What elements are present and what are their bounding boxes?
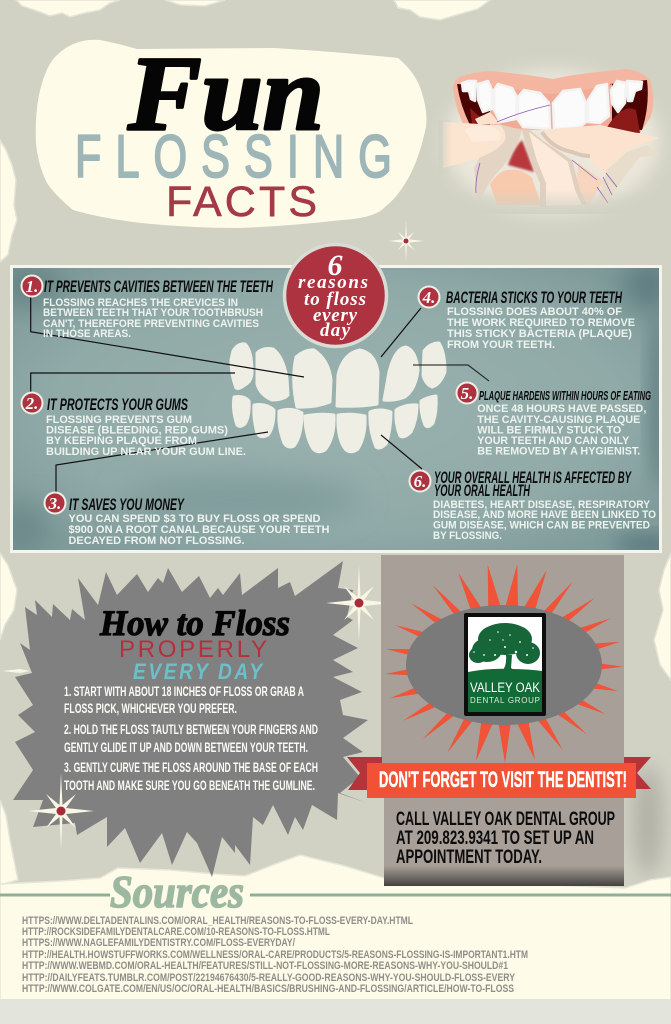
title: Flossing: FLOSSING [75,124,392,191]
leader lines [31,297,489,493]
oval [406,605,602,725]
finger [475,112,500,124]
reason 5: THE CAVITY-CAUSING PLAQUE [477,414,640,426]
source list: HTTP://ROCKSIDEFAMILYDENTALCARE.COM/10-REASONS-TO-FLOSS.HTML [22,926,330,938]
reason 3: $900 ON A ROOT CANAL BECAUSE YOUR TEETH [68,524,330,536]
ribbon banner [347,757,651,798]
reason 6: DIABETES, HEART DISEASE, RESPIRATORY [433,499,651,511]
panel background [381,555,624,765]
reason 1 [22,276,273,340]
flossing steps: 3. GENTLY CURVE THE FLOSS AROUND THE BASE OF EACH [64,760,318,775]
reason 4: FROM YOUR TEETH. [447,339,555,351]
badge: 6 reasons to floss every day: reasons [298,272,368,293]
reason 4: THIS STICKY BACTERIA (PLAQUE) [447,328,632,340]
reason 5: 5. [461,384,473,403]
reason 5: BE REMOVED BY A HYGIENIST. [477,446,640,458]
sunburst [385,564,623,763]
floss [476,105,617,203]
source list: HTTP://WWW.COLGATE.COM/EN/US/OC/ORAL-HEALTH/BASICS/BRUSHING-AND-FLOSSING/ARTICLE/HOW-TO-FLOSS [22,983,514,995]
badge: 6 reasons to floss every day: to floss [304,289,366,310]
mouth below teeth [508,140,534,172]
badge: 6 reasons to floss every day [284,244,386,346]
source list: HTTP://WWW.WEBMD.COM/ORAL-HEALTH/FEATURES/STILL-NOT-FLOSSING-MORE-REASONS-WHY-YOU-SHOULD#1 [22,960,508,972]
reason 1: IN THOSE AREAS. [43,328,131,340]
flossing steps: TOOTH AND MAKE SURE YOU GO BENEATH THE GUMLINE. [64,778,315,793]
reason 6 [410,468,656,542]
reason 2: DISEASE (BLEEDING, RED GUMS) [46,424,228,436]
flossing steps: 2. HOLD THE FLOSS TAUTLY BETWEEN YOUR FINGERS AND [64,722,318,737]
reason 1: 1. [26,277,38,296]
reason 3: IT SAVES YOU MONEY [69,495,185,514]
title blob [36,40,426,228]
reason 3: 3. [48,494,61,513]
badge: 6 reasons to floss every day: 6 [328,249,342,282]
sources heading: Sources [110,866,244,917]
reason 2: 2. [25,394,38,413]
logo: valley oak dental group: VALLEY OAK [470,680,540,695]
title: Fun: Fun [127,35,324,152]
reason 3 [44,492,330,547]
reason 1: IT PREVENTS CAVITIES BETWEEN THE TEETH [44,277,273,296]
reason 6: DISEASE, AND MORE HAVE BEEN LINKED TO [433,509,656,521]
reason 4: THE WORK REQUIRED TO REMOVE [447,317,635,329]
reason 4: FLOSSING DOES ABOUT 40% OF [447,306,622,318]
logo: valley oak dental group [464,613,546,716]
source list: HTTPS://WWW.NAGLEFAMILYDENTISTRY.COM/FLOSS-EVERYDAY/ [22,937,295,949]
sparkle [28,773,94,849]
badge: 6 reasons to floss every day: day [320,320,351,341]
source list: HTTP://HEALTH.HOWSTUFFWORKS.COM/WELLNESS/ORAL-CARE/PRODUCTS/5-REASONS-FLOSSING-IS-IMPORTANT1.HTM [22,949,528,961]
reason 6: BY FLOSSING. [433,530,502,542]
flossing steps: 1. START WITH ABOUT 18 INCHES OF FLOSS OR GRAB A [64,684,304,699]
reason 2: FLOSSING PREVENTS GUM [46,414,192,426]
panel: visit the dentist [347,555,651,886]
reason 5: ONCE 48 HOURS HAVE PASSED, [477,403,646,415]
reason 1: FLOSSING REACHES THE CREVICES IN [43,297,238,309]
source list [22,915,528,995]
starburst shape [13,561,368,877]
reason 1: CAN'T, THEREFORE PREVENTING CAVITIES [43,318,259,330]
title group [36,35,426,228]
call to action: AT 209.823.9341 TO SET UP AN [396,828,594,849]
mouth interior [457,80,648,130]
reason 6: 6. [414,472,426,491]
lips [453,69,653,133]
sparkle [2,669,30,673]
tan finger behind thumb [474,124,522,203]
reason 5 [456,382,651,458]
icon: oak tree [469,623,540,671]
panel: how to floss [13,561,368,877]
panel: six reasons [0,244,671,558]
illustration: mouth with floss [438,69,661,215]
flossing steps: GENTLY GLIDE IT UP AND DOWN BETWEEN YOUR TEETH. [64,740,308,755]
right wrapped finger [597,145,660,215]
reason 4 [418,286,635,351]
upper teeth [462,81,642,129]
heading: every day: EVERY DAY [133,660,264,684]
reason 5: YOUR TEETH AND CAN ONLY [477,435,630,447]
shading [632,765,664,875]
sparkle [326,565,392,641]
reason 3: DECAYED FROM NOT FLOSSING. [68,535,244,547]
middle finger [522,130,587,207]
source list: HTTP://DAILYFEATS.TUMBLR.COM/POST/22194676430/5-REALLY-GOOD-REASONS-WHY-YOU-SHOULD-FLOSS-EVERY [22,972,516,984]
reason 1: BETWEEN TEETH THAT YOUR TOOTHBRUSH [43,307,263,319]
right hand [540,125,660,175]
sparkle [388,220,424,262]
flossing steps: FLOSS PICK, WHICHEVER YOU PREFER. [64,701,237,716]
title: Facts: FACTS [166,178,317,226]
reason 2: IT PROTECTS YOUR GUMS [47,395,188,414]
heading: how to floss: How to Floss [99,603,290,643]
reason 5: WILL BE FIRMLY STUCK TO [477,424,622,436]
left thumb [443,122,505,168]
call to action [396,809,615,868]
divider [0,894,671,896]
reason 2 [22,392,246,458]
logo: valley oak dental group: DENTAL GROUP [470,696,540,705]
source list: HTTPS://WWW.DELTADENTALINS.COM/ORAL_HEALTH/REASONS-TO-FLOSS-EVERY-DAY.HTML [22,915,413,927]
reason 2: BY KEEPING PLAQUE FROM [46,435,197,447]
reason 6: GUM DISEASE, WHICH CAN BE PREVENTED [433,520,650,532]
reason 6: YOUR ORAL HEALTH [434,481,530,500]
bottom cream band [0,855,671,1000]
heading: properly: PROPERLY [119,636,267,663]
reason 4: 4. [422,288,435,307]
reason 3: YOU CAN SPEND $3 TO BUY FLOSS OR SPEND [68,513,321,525]
reason 2: BUILDING UP NEAR YOUR GUM LINE. [46,446,246,458]
call to action: APPOINTMENT TODAY. [396,847,542,868]
sources section [0,866,671,995]
badge: 6 reasons to floss every day: every [313,305,358,326]
teeth illustration [231,343,445,452]
flossing steps [64,684,318,793]
bottom strip [0,999,671,1024]
panel frame [12,266,660,552]
